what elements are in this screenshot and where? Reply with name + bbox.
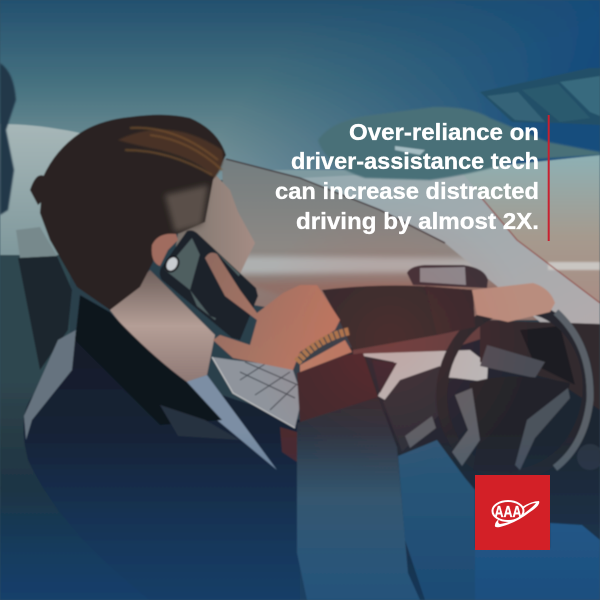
neck (110, 270, 215, 382)
driver's left arm reaching to wheel (322, 283, 555, 350)
headline text: driving by almost 2X. (296, 208, 539, 234)
ear (152, 234, 178, 266)
beaded bracelet (297, 331, 350, 362)
jacket shoulder highlight (24, 330, 76, 440)
overhead console (480, 68, 600, 125)
sun visor (318, 107, 600, 180)
windshield view (222, 158, 560, 320)
rear-view mirror (407, 265, 488, 288)
rear headrest and seat (16, 227, 72, 370)
A-pillar and right window (300, 155, 600, 325)
jeans (398, 440, 600, 600)
steering wheel (429, 296, 600, 486)
face (170, 165, 255, 310)
AAA logo (475, 475, 550, 550)
jacket collar (75, 295, 222, 425)
sleeve cuff (297, 353, 378, 422)
hair (30, 115, 226, 310)
driver's sleeve (297, 397, 420, 600)
headline text: can increase distracted (275, 178, 539, 204)
grey shirt (183, 375, 277, 470)
dashboard (340, 320, 600, 600)
AAA logo: AAA (494, 504, 522, 521)
headline text (275, 119, 539, 234)
headline text: Over-reliance on (349, 119, 539, 145)
wrist (300, 340, 352, 372)
phone (160, 230, 258, 340)
driver's jacket torso (23, 325, 300, 600)
side window (0, 63, 160, 600)
quilted collar lining (160, 357, 302, 462)
pillar trim lines (226, 159, 600, 303)
headline text: driver-assistance tech (291, 148, 539, 174)
red vertical accent line (548, 115, 550, 241)
hand holding phone (205, 253, 340, 370)
